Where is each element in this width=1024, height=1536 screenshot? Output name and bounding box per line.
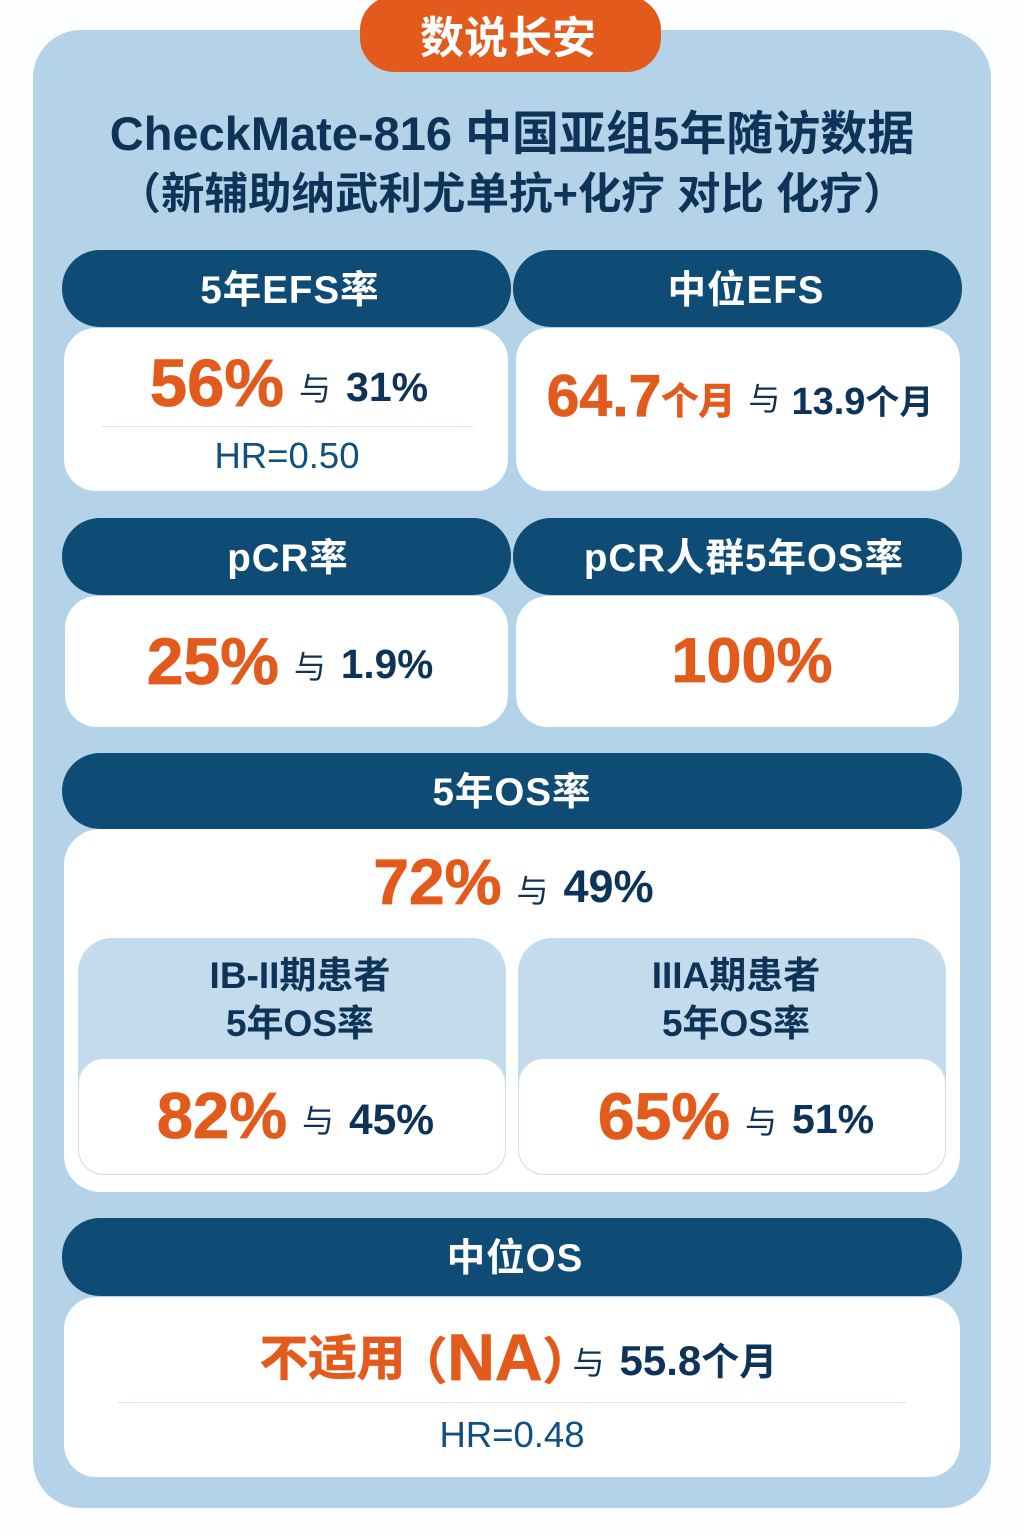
- hazard ratio: HR=0.50: [214, 435, 360, 476]
- header: pCR率: [62, 518, 511, 595]
- subheading: IB-II期患者5年OS率: IB-II期患者: [210, 955, 390, 996]
- title: [110, 107, 914, 219]
- header: 5年EFS率: 5年EFS率: [200, 268, 380, 312]
- title: （新辅助纳武利尤单抗+化疗 对比 化疗）: [117, 171, 907, 219]
- hazard ratio: HR=0.48: [439, 1414, 585, 1455]
- subcard: 82% vs 45%: [78, 1058, 506, 1175]
- badge: 数说长安: 数说长安: [420, 14, 596, 63]
- value: 72% vs 49%: 72% 与 49%: [373, 846, 654, 918]
- divider: [118, 1402, 906, 1403]
- subheading: IIIA期患者5年OS率: 5年OS率: [662, 1003, 810, 1044]
- header: 5年EFS率: [62, 250, 511, 327]
- panel: 5年EFS率 values: [64, 328, 508, 491]
- panel: 5年OS率: [64, 829, 960, 1192]
- header: 中位EFS: [513, 250, 962, 327]
- value: 25% vs 1.9%: 25% 与 1.9%: [147, 624, 433, 698]
- badge: 数说长安: [360, 0, 661, 72]
- value: 82% vs 45%: 82% 与 45%: [157, 1079, 434, 1152]
- header: 中位OS: 中位OS: [447, 1237, 583, 1280]
- subheading: IIIA期患者5年OS率: IIIA期患者: [652, 955, 820, 996]
- subpanel: IB-II期: [78, 938, 506, 1175]
- header: pCR人群5年OS率: [513, 518, 962, 595]
- divider: [102, 426, 473, 427]
- panel: pCR人群5年OS率 value: [516, 596, 959, 727]
- title: CheckMate-816 中国亚组5年随访数据: [110, 107, 914, 160]
- subheading: IB-II期患者5年OS率: 5年OS率: [226, 1003, 374, 1044]
- panel: 中位OS values: [64, 1297, 960, 1477]
- header: pCR率: pCR率: [227, 536, 349, 580]
- panel: 中位EFS values: [516, 328, 960, 491]
- header: 5年OS率: [62, 753, 962, 829]
- subpanel: IIIA期: [518, 938, 946, 1175]
- header: 中位OS: [62, 1218, 962, 1296]
- value: 64.7 vs 13.9 months: 64.7个月 与 13.9个月: [547, 363, 933, 429]
- panel: pCR率 values: [65, 596, 508, 727]
- value: 56% vs 31%: 56% 与 31%: [150, 346, 428, 421]
- header: 中位EFS: 中位EFS: [668, 268, 824, 312]
- header: 5年OS率: 5年OS率: [432, 771, 592, 814]
- subheading: IIIA期患者5年OS率: [652, 955, 820, 1044]
- header: pCR人群5年OS率: pCR人群5年OS率: [584, 536, 904, 580]
- value: 65% vs 51%: 65% 与 51%: [598, 1079, 874, 1153]
- value: NA vs 55.8 months: 不适用（NA）与 55.8个月: [260, 1320, 777, 1394]
- subcard: 65% vs 51%: [518, 1058, 946, 1175]
- subheading: IB-II期患者5年OS率: [210, 955, 390, 1044]
- value: 100%: 100%: [671, 626, 833, 696]
